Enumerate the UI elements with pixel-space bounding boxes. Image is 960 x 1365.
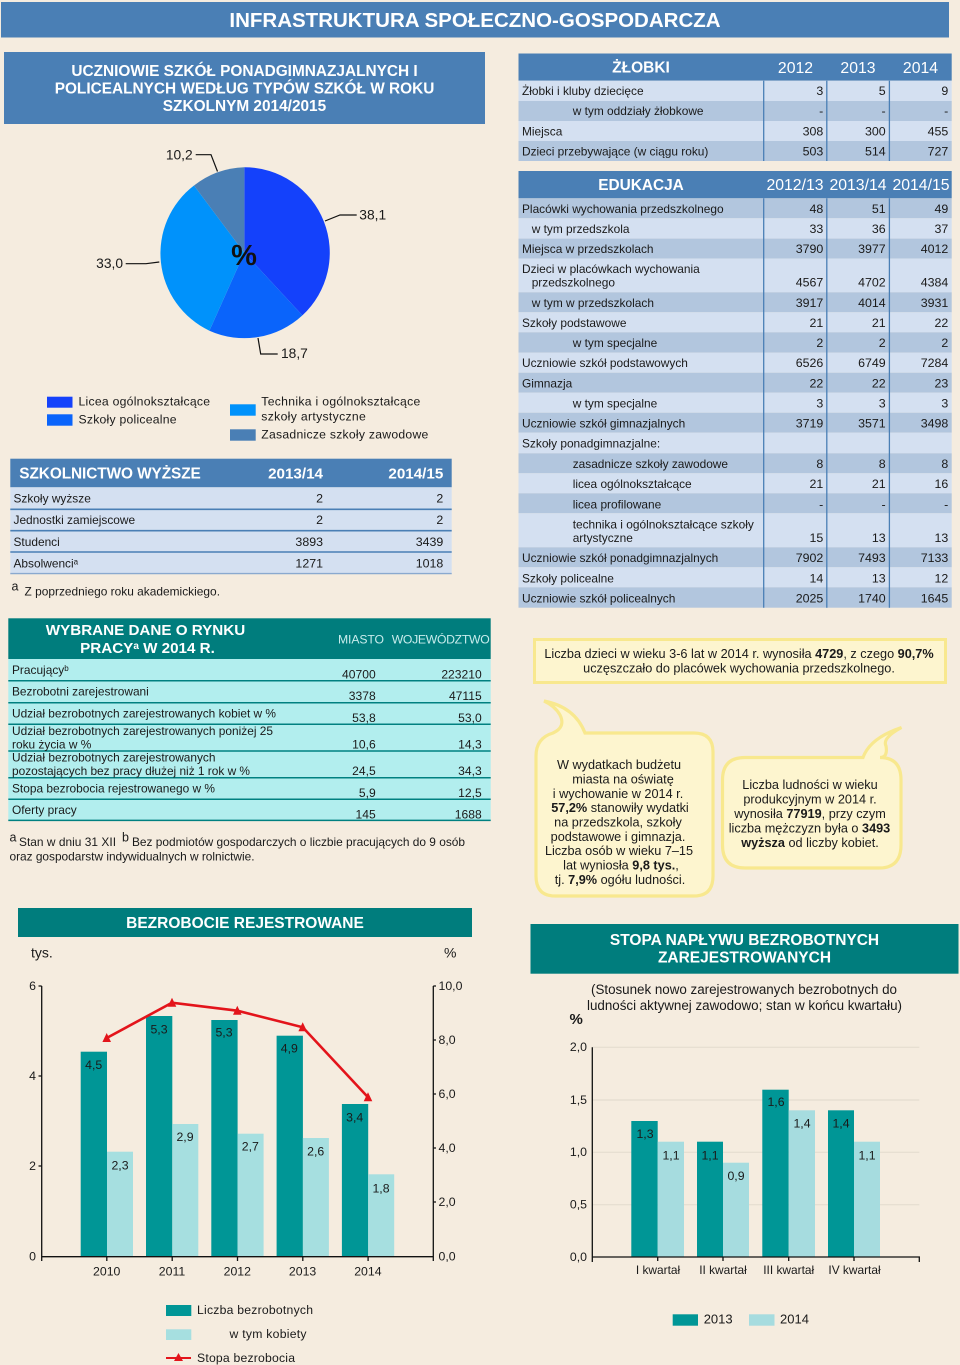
axes: 2011 xyxy=(159,1264,185,1278)
labour market header: W 2014 R. xyxy=(139,640,215,657)
education rows: 22 xyxy=(935,316,948,330)
labour market footnote: oraz gospodarstw indywidualnych w rolnictwie. xyxy=(10,850,254,864)
inflow bar value labels: 1,4 xyxy=(793,1117,811,1131)
inflow subtitle: % xyxy=(570,1011,583,1028)
education rows: 3 xyxy=(941,396,948,410)
axes: 4 xyxy=(29,1069,36,1083)
unemployment heading xyxy=(18,908,472,937)
axes: 2,0 xyxy=(438,1195,456,1209)
unemployment heading: BEZROBOCIE REJESTROWANE xyxy=(126,915,364,932)
axes: 6,0 xyxy=(438,1087,456,1101)
higher education rows: 2 xyxy=(436,513,443,527)
labour market rows: 223210 xyxy=(441,667,482,681)
bar value labels: 5,3 xyxy=(215,1026,233,1040)
nursery rows: 308 xyxy=(803,124,823,138)
education rows: - xyxy=(882,497,886,511)
labour market rows: 24,5 xyxy=(352,764,376,778)
nursery rows: - xyxy=(819,104,823,118)
education rows: Dzieci w placówkach wychowania xyxy=(522,262,700,276)
education rows: 3917 xyxy=(796,296,823,310)
labour market rows: Bezrobotni zarejestrowani xyxy=(12,685,149,699)
education rows: 3 xyxy=(879,396,886,410)
higher education header: SZKOLNICTWO WYŻSZE xyxy=(19,466,201,483)
axes xyxy=(29,979,463,1278)
pie legend: Szkoły policealne xyxy=(78,412,177,426)
education rows: 2 xyxy=(941,336,948,350)
callout: education spending: Liczba osób w wieku 7–15 xyxy=(545,844,693,858)
gridlines and axes: 1,0 xyxy=(570,1145,587,1159)
labour market rows: Udział bezrobotnych zarejestrowanych xyxy=(12,751,216,765)
nursery rows: 5 xyxy=(879,84,886,98)
callout: working-age population: wyższa od liczby kobiet. xyxy=(740,836,879,850)
gridlines and axes xyxy=(570,1040,919,1277)
higher education rows: 2 xyxy=(436,492,443,506)
labour market rows: 14,3 xyxy=(458,737,482,751)
callout: education spending: tj. 7,9% ogółu ludności. xyxy=(555,873,685,887)
labour market header xyxy=(8,618,491,659)
nursery rows: 9 xyxy=(941,84,948,98)
bars: 2013 xyxy=(631,1090,854,1257)
bar value labels xyxy=(85,1022,390,1195)
labour market footnote: a xyxy=(10,830,16,844)
higher education rows: Szkoły wyższe xyxy=(14,492,91,506)
axes: 4,0 xyxy=(438,1141,456,1155)
labour market rows xyxy=(8,659,491,822)
nursery rows: 300 xyxy=(865,124,886,138)
labour market rows: 10,6 xyxy=(352,737,376,751)
labour market rows: 34,3 xyxy=(458,764,482,778)
nursery rows: 3 xyxy=(816,84,823,98)
education rows: 13 xyxy=(872,531,886,545)
education rows: przedszkolnego xyxy=(532,276,615,290)
labour market rows: Stopa bezrobocia rejestrowanego w % xyxy=(12,782,215,796)
education rows: 21 xyxy=(872,316,886,330)
education rows: 16 xyxy=(935,477,948,491)
education rows: w tym specjalne xyxy=(572,396,658,410)
pie chart xyxy=(160,167,330,338)
higher education rows: Absolwenci xyxy=(14,556,74,570)
labour market header: WYBRANE DANE O RYNKU xyxy=(46,622,245,639)
pie chart heading: UCZNIOWIE SZKÓŁ PONADGIMNAZJALNYCH I xyxy=(71,62,418,80)
education rows: 1645 xyxy=(921,591,948,605)
bars: women xyxy=(107,1124,394,1257)
higher education rows: 3893 xyxy=(295,535,323,549)
bar value labels: 2,7 xyxy=(242,1140,259,1154)
labour market header: WOJEWÓDZTWO xyxy=(392,631,490,646)
nursery header xyxy=(518,54,952,81)
education rows: 15 xyxy=(810,531,823,545)
inflow bar value labels: 0,9 xyxy=(727,1169,745,1183)
callout: working-age population: Liczba ludności w wieku xyxy=(742,778,878,792)
gridlines and axes: 2,0 xyxy=(570,1040,587,1054)
axes: 2010 xyxy=(93,1264,121,1278)
inflow bar value labels xyxy=(636,1095,876,1183)
education rows: 22 xyxy=(872,376,886,390)
education rows: 3790 xyxy=(796,242,823,256)
education rows: w tym specjalne xyxy=(572,336,658,350)
panel: higher education table xyxy=(10,459,452,598)
bars: 2014 xyxy=(658,1110,880,1257)
education rows: 3571 xyxy=(858,416,886,430)
education rows: Szkoły ponadgimnazjalne: xyxy=(522,436,660,450)
education header: 2012/13 xyxy=(766,177,824,194)
bar value labels: 4,5 xyxy=(85,1058,102,1072)
panel: registered unemployment chart xyxy=(18,908,472,1365)
axis units: % xyxy=(444,944,456,960)
pie legend xyxy=(47,395,429,442)
education rows: Uczniowie szkół policealnych xyxy=(522,591,675,605)
gridlines and axes: III kwartał xyxy=(763,1263,814,1277)
education rows: 7493 xyxy=(858,551,886,565)
education rows: 4014 xyxy=(858,296,886,310)
education rows: 23 xyxy=(935,376,948,390)
callout: working-age population xyxy=(722,728,902,868)
labour market rows: roku życia w % xyxy=(12,737,92,751)
unemployment legend: w tym kobiety xyxy=(228,1327,307,1341)
pie chart heading: POLICEALNYCH WEDŁUG TYPÓW SZKÓŁ W ROKU xyxy=(55,80,434,98)
nursery rows: 503 xyxy=(803,144,823,158)
axes: 2012 xyxy=(224,1264,251,1278)
education rows: 7133 xyxy=(921,551,948,565)
education rows: Miejsca w przedszkolach xyxy=(522,242,654,256)
education rows: Placówki wychowania przedszkolnego xyxy=(522,202,724,216)
education rows: w tym przedszkola xyxy=(531,222,630,236)
education rows: 13 xyxy=(872,571,886,585)
labour market rows: Pracujący xyxy=(12,663,64,677)
education rows: 21 xyxy=(872,477,886,491)
education rows: artystyczne xyxy=(573,531,633,545)
panel: nursery table xyxy=(518,54,952,161)
bar value labels: 2,3 xyxy=(111,1158,129,1172)
pie value labels with leaders: 18,7 xyxy=(281,346,308,361)
education rows: 1740 xyxy=(858,591,886,605)
education rows: 4384 xyxy=(921,276,948,290)
line: unemployment rate xyxy=(102,998,372,1101)
education rows: Uczniowie szkół ponadgimnazjalnych xyxy=(522,551,718,565)
pie chart: % xyxy=(231,240,257,272)
nursery header: 2014 xyxy=(903,60,938,77)
callout: education spending: miasta na oświatę xyxy=(572,772,674,786)
education header: 2013/14 xyxy=(829,177,887,194)
pie legend: Licea ogólnokształcące xyxy=(78,395,210,409)
pie legend: szkoły artystyczne xyxy=(261,409,366,423)
inflow heading: ZAREJESTROWANYCH xyxy=(658,950,831,966)
callout: education spending xyxy=(536,701,713,896)
gridlines and axes: IV kwartał xyxy=(828,1263,881,1277)
axes: 0,0 xyxy=(438,1250,456,1264)
education rows: 8 xyxy=(879,457,886,471)
callout: education spending: lat wyniosła 9,8 tys., xyxy=(563,858,679,872)
nursery rows: Dzieci przebywające (w ciągu roku) xyxy=(522,144,708,158)
education rows: Szkoły podstawowe xyxy=(522,316,627,330)
higher education rows xyxy=(10,487,452,574)
higher education footnote: Z poprzedniego roku akademickiego. xyxy=(24,584,220,598)
labour market rows: 5,9 xyxy=(359,786,376,800)
education rows: 3 xyxy=(816,396,823,410)
axes: 2 xyxy=(29,1159,36,1173)
education rows: 8 xyxy=(941,457,948,471)
inflow bar value labels: 1,4 xyxy=(832,1117,850,1131)
pie value labels with leaders: 10,2 xyxy=(166,148,193,162)
axes: 10,0 xyxy=(438,979,463,993)
education rows: - xyxy=(819,497,823,511)
education rows: 4702 xyxy=(858,276,886,290)
education rows: Uczniowie szkół gimnazjalnych xyxy=(522,416,685,430)
education rows: 2 xyxy=(816,336,823,350)
education rows: 4012 xyxy=(921,242,948,256)
inflow subtitle xyxy=(570,982,902,1028)
education rows: 6749 xyxy=(858,356,886,370)
education rows: 7284 xyxy=(921,356,948,370)
education rows: 21 xyxy=(810,477,823,491)
higher education rows: 2 xyxy=(316,492,323,506)
panel: pie chart of students by school type xyxy=(4,52,485,442)
inflow bar value labels: 1,1 xyxy=(701,1148,719,1162)
labour market header: MIASTO xyxy=(338,632,384,646)
nursery rows: 727 xyxy=(928,144,948,158)
axis units: tys. xyxy=(31,944,53,960)
education rows: 21 xyxy=(810,316,823,330)
panel: unemployment inflow chart xyxy=(530,924,958,1326)
nursery header: 2013 xyxy=(840,60,876,77)
callout: education spending: podstawowe i gimnazja. xyxy=(551,830,685,844)
education rows: Uczniowie szkół podstawowych xyxy=(522,356,688,370)
labour market rows: 53,0 xyxy=(458,711,482,725)
bar value labels: 2,6 xyxy=(307,1145,324,1159)
labour market rows: 3378 xyxy=(349,689,376,703)
higher education header: 2014/15 xyxy=(388,466,444,483)
education rows: technika i ogólnokształcące szkoły xyxy=(573,517,754,531)
education rows: 4567 xyxy=(796,276,823,290)
unemployment legend: Stopa bezrobocia xyxy=(197,1351,295,1365)
nursery rows: - xyxy=(944,104,948,118)
education rows: zasadnicze szkoły zawodowe xyxy=(573,457,728,471)
education rows: 3719 xyxy=(796,416,823,430)
axes: 0 xyxy=(29,1250,36,1264)
labour market footnote: b xyxy=(122,830,129,844)
education rows: 13 xyxy=(935,531,948,545)
education rows: 51 xyxy=(872,202,886,216)
pie chart heading: SZKOLNYM 2014/2015 xyxy=(163,98,327,115)
labour market header: PRACY xyxy=(80,640,133,657)
education rows: 2025 xyxy=(796,591,823,605)
labour market rows: 47115 xyxy=(449,689,482,703)
gridlines and axes: 0,5 xyxy=(570,1198,587,1212)
education rows: Szkoły policealne xyxy=(522,571,614,585)
inflow legend: 2013 xyxy=(704,1312,733,1326)
gridlines and axes: I kwartał xyxy=(636,1263,680,1277)
labour market rows: Udział bezrobotnych zarejestrowanych kobiet w % xyxy=(12,706,276,720)
labour market rows: 1688 xyxy=(455,808,482,822)
pie value labels with leaders: 33,0 xyxy=(96,256,123,271)
inflow legend: 2014 xyxy=(780,1312,809,1326)
education rows: 36 xyxy=(872,222,886,236)
panel: labour market table xyxy=(8,618,491,864)
callout: education spending: i wychowanie w 2014 r. xyxy=(553,787,683,801)
higher education footnote: a xyxy=(12,580,18,594)
pie value labels with leaders: 38,1 xyxy=(359,208,386,222)
inflow heading: STOPA NAPŁYWU BEZROBOTNYCH xyxy=(610,932,879,949)
bars: total unemployed xyxy=(81,1016,368,1257)
education rows: 12 xyxy=(935,571,948,585)
education rows: 37 xyxy=(935,222,948,236)
nursery rows: w tym oddziały żłobkowe xyxy=(572,104,704,118)
panel: education table xyxy=(518,171,952,608)
bar value labels: 5,3 xyxy=(150,1022,168,1036)
education rows: licea profilowane xyxy=(573,497,662,511)
pie value labels with leaders xyxy=(96,148,386,361)
education rows: 8 xyxy=(816,457,823,471)
axes: 2013 xyxy=(289,1264,316,1278)
labour market rows: 53,8 xyxy=(352,711,376,725)
gridlines and axes: II kwartał xyxy=(699,1263,747,1277)
higher education footnote xyxy=(12,580,220,598)
callout: education spending: 57,2% stanowiły wydatki xyxy=(551,801,689,815)
unemployment legend xyxy=(166,1303,313,1365)
unemployment legend: Liczba bezrobotnych xyxy=(197,1303,313,1317)
pie chart heading xyxy=(4,52,485,124)
labour market footnote: Bez podmiotów gospodarczych o liczbie pracujących do 9 osób xyxy=(132,835,465,849)
education rows xyxy=(518,198,952,608)
axes: 8,0 xyxy=(438,1033,456,1047)
education rows: 6526 xyxy=(796,356,823,370)
labour market rows: b xyxy=(64,664,69,673)
gridlines and axes: 1,5 xyxy=(570,1093,587,1107)
education rows: 2 xyxy=(879,336,886,350)
labour market footnote xyxy=(10,830,465,864)
higher education rows: 2 xyxy=(316,513,323,527)
labour market rows: Oferty pracy xyxy=(12,803,77,817)
labour market header: a xyxy=(133,641,139,652)
education rows: w tym w przedszkolach xyxy=(531,296,654,310)
labour market rows: 40700 xyxy=(342,667,376,681)
education rows: licea ogólnokształcące xyxy=(573,477,692,491)
education header: 2014/15 xyxy=(892,177,950,194)
bar value labels: 3,4 xyxy=(346,1111,363,1125)
inflow subtitle: (Stosunek nowo zarejestrowanych bezrobotnych do xyxy=(591,982,897,997)
higher education header: 2013/14 xyxy=(268,466,324,483)
education rows: 3498 xyxy=(921,416,948,430)
education rows: 33 xyxy=(810,222,823,236)
education rows: 3977 xyxy=(858,242,886,256)
callout: working-age population: wynosiła 77919, przy czym xyxy=(733,807,886,821)
higher education rows: 1271 xyxy=(295,556,323,570)
education rows: 14 xyxy=(810,571,823,585)
callout: education spending: W wydatkach budżetu xyxy=(557,758,681,772)
inflow bar value labels: 1,6 xyxy=(767,1095,785,1109)
education rows: 3931 xyxy=(921,296,948,310)
callout: working-age population: liczba mężczyzn była o 3493 xyxy=(729,822,890,836)
bar value labels: 1,8 xyxy=(372,1181,390,1195)
callout: children aged 3-6 xyxy=(534,640,946,682)
higher education rows: a xyxy=(74,558,79,566)
nursery header: 2012 xyxy=(778,60,813,77)
inflow bar value labels: 1,3 xyxy=(636,1127,654,1141)
labour market footnote: Stan w dniu 31 XII xyxy=(19,835,116,849)
nursery rows: 514 xyxy=(865,144,886,158)
education rows: Gimnazja xyxy=(522,376,573,390)
callout: working-age population: produkcyjnym w 2014 r. xyxy=(743,792,877,806)
bar value labels: 2,9 xyxy=(176,1130,194,1144)
inflow legend xyxy=(673,1312,809,1326)
labour market rows: 145 xyxy=(356,808,376,822)
nursery rows: Żłobki i kluby dziecięce xyxy=(522,84,644,98)
axis units xyxy=(31,944,456,960)
nursery rows: - xyxy=(882,104,886,118)
education rows: 22 xyxy=(810,376,823,390)
nursery rows: Miejsca xyxy=(522,124,563,138)
pie legend: Technika i ogólnokształcące xyxy=(261,395,421,409)
education header: EDUKACJA xyxy=(598,177,684,194)
education rows: 7902 xyxy=(796,551,823,565)
higher education rows: 1018 xyxy=(416,556,443,570)
nursery rows xyxy=(518,81,952,161)
inflow heading xyxy=(530,924,958,974)
education header xyxy=(518,171,952,198)
title banner: INFRASTRUKTURA SPOŁECZNO-GOSPODARCZA xyxy=(229,9,721,32)
higher education rows: Jednostki zamiejscowe xyxy=(14,513,135,527)
callout: children aged 3-6: uczęszczało do placówek wychowania przedszkolnego. xyxy=(583,662,895,676)
higher education header xyxy=(10,459,452,487)
axes: 2014 xyxy=(354,1264,382,1278)
labour market rows: pozostających bez pracy dłużej niż 1 rok w % xyxy=(12,764,250,778)
inflow bar value labels: 1,1 xyxy=(662,1148,680,1162)
inflow bar value labels: 1,1 xyxy=(858,1148,876,1162)
nursery rows: 455 xyxy=(928,124,948,138)
higher education rows: Studenci xyxy=(14,535,60,549)
pie legend: Zasadnicze szkoły zawodowe xyxy=(261,428,429,442)
inflow subtitle: ludności aktywnej zawodowo; stan w końcu kwartału) xyxy=(587,998,902,1013)
callout: children aged 3-6: Liczba dzieci w wieku 3-6 lat w 2014 r. wynosiła 4729, z czego 90,7% xyxy=(544,647,934,661)
axes: 6 xyxy=(29,979,36,993)
gridlines and axes: 0,0 xyxy=(570,1250,587,1264)
labour market rows: Udział bezrobotnych zarejestrowanych poniżej 25 xyxy=(12,724,273,738)
bar value labels: 4,9 xyxy=(281,1042,298,1056)
education rows: 48 xyxy=(810,202,823,216)
title banner xyxy=(1,2,949,38)
nursery header: ŻŁOBKI xyxy=(612,60,670,76)
labour market rows: 12,5 xyxy=(458,786,482,800)
axis lines xyxy=(592,1047,919,1262)
higher education rows: 3439 xyxy=(416,535,443,549)
callout: education spending: na przedszkola, szkoły xyxy=(554,816,682,830)
education rows: 49 xyxy=(935,202,948,216)
education rows: - xyxy=(944,497,948,511)
